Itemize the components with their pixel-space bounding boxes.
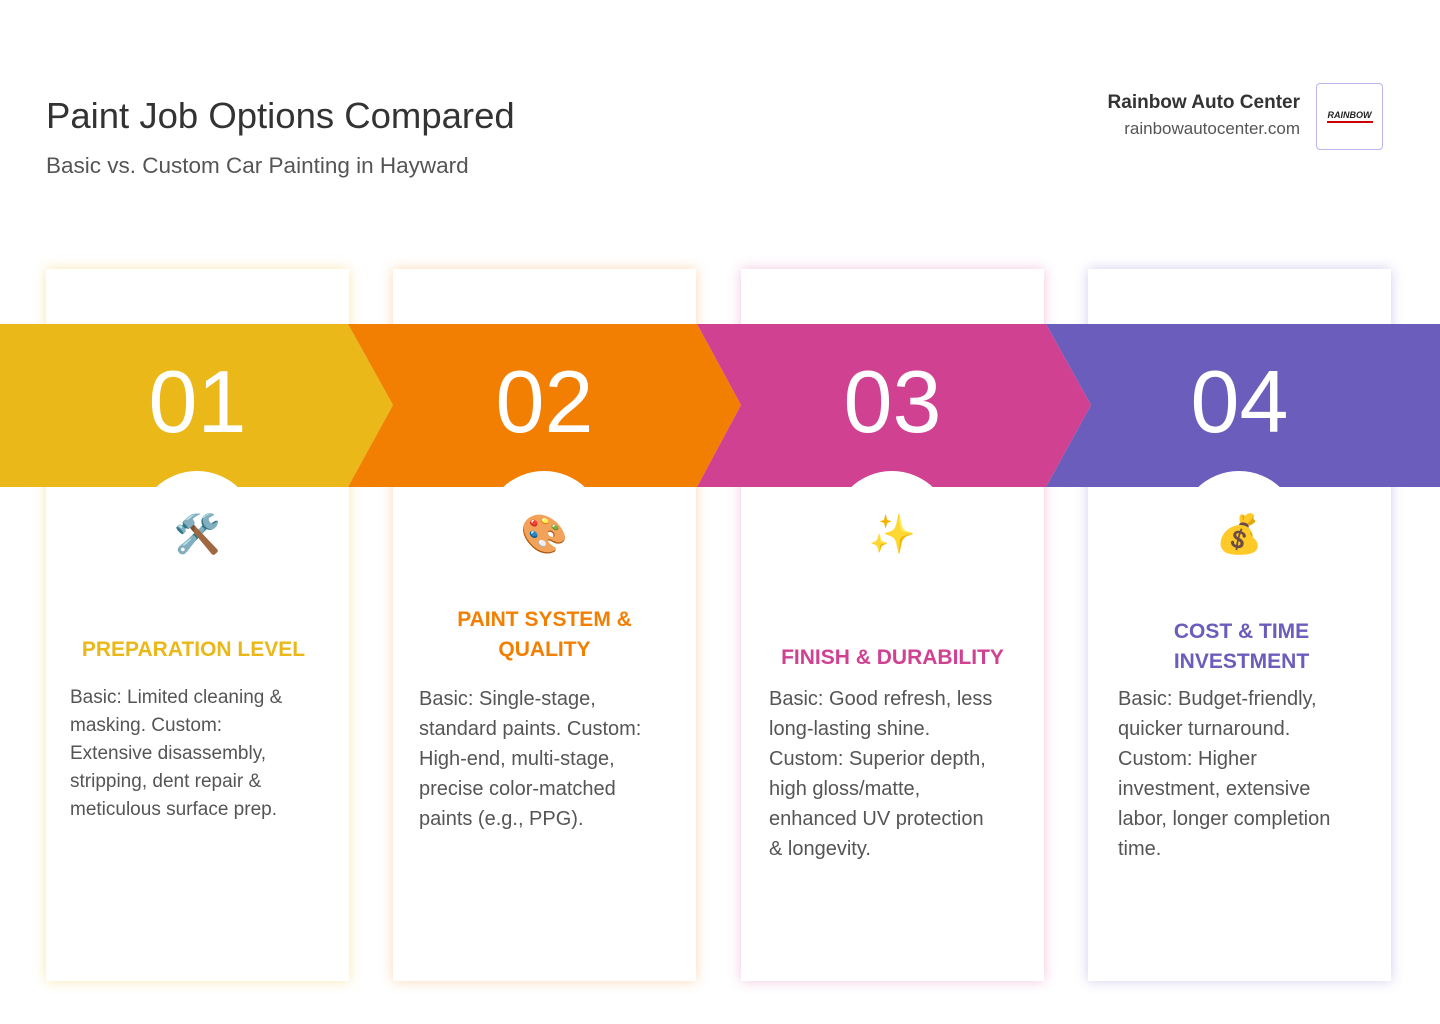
icon: sparkles: ✨ bbox=[869, 513, 916, 557]
text: 02 bbox=[496, 352, 593, 451]
logo bbox=[1316, 83, 1383, 150]
heading 2: QUALITY bbox=[498, 638, 591, 661]
text 1: Basic: Limited cleaning & masking. Custom: Extensive disassembly, stripping, dent repair & meticulous surface prep. bbox=[70, 687, 282, 820]
numbers: 01 bbox=[149, 352, 246, 451]
icon: palette: 🎨 bbox=[521, 513, 568, 557]
card 2 bbox=[393, 269, 696, 981]
subtitle: Basic vs. Custom Car Painting in Hayward bbox=[46, 153, 469, 178]
heading 4: INVESTMENT bbox=[1174, 650, 1309, 673]
heading 4 bbox=[1174, 620, 1309, 673]
logo: RAINBOW bbox=[1328, 110, 1372, 120]
text: 04 bbox=[1191, 352, 1288, 451]
heading 2: PAINT SYSTEM & bbox=[457, 608, 632, 631]
heading 1: PREPARATION LEVEL bbox=[82, 638, 305, 661]
text 3: & longevity. bbox=[769, 838, 871, 860]
icon: tools: 🛠️ bbox=[174, 513, 221, 557]
card 3 bbox=[741, 269, 1044, 981]
icon: money bag: 💰 bbox=[1216, 513, 1263, 557]
text 3: enhanced UV protection bbox=[769, 808, 984, 830]
text 3 bbox=[769, 688, 992, 860]
banner arrows bbox=[0, 324, 1440, 487]
circles bbox=[137, 471, 257, 591]
brand text: rainbowautocenter.com bbox=[1124, 119, 1300, 138]
card 4 bbox=[1088, 269, 1391, 981]
text 4: Basic: Budget-friendly, quicker turnaround. Custom: Higher investment, extensive labor, longer completion time. bbox=[1118, 688, 1330, 860]
text: 03 bbox=[844, 352, 941, 451]
heading 4: COST & TIME bbox=[1174, 620, 1309, 643]
heading 3: FINISH & DURABILITY bbox=[781, 646, 1004, 669]
brand text: Rainbow Auto Center bbox=[1108, 92, 1300, 113]
text 3: long-lasting shine. bbox=[769, 718, 930, 740]
brand text bbox=[1108, 92, 1300, 138]
title: Paint Job Options Compared bbox=[46, 95, 515, 136]
card 1 bbox=[46, 269, 349, 981]
text 2: Basic: Single-stage, standard paints. Custom: High-end, multi-stage, precise color-matched paints (e.g., PPG). bbox=[419, 688, 641, 830]
text 3: Basic: Good refresh, less bbox=[769, 688, 992, 710]
text 3: high gloss/matte, bbox=[769, 778, 920, 800]
text 3: Custom: Superior depth, bbox=[769, 748, 986, 770]
heading 2 bbox=[457, 608, 632, 661]
